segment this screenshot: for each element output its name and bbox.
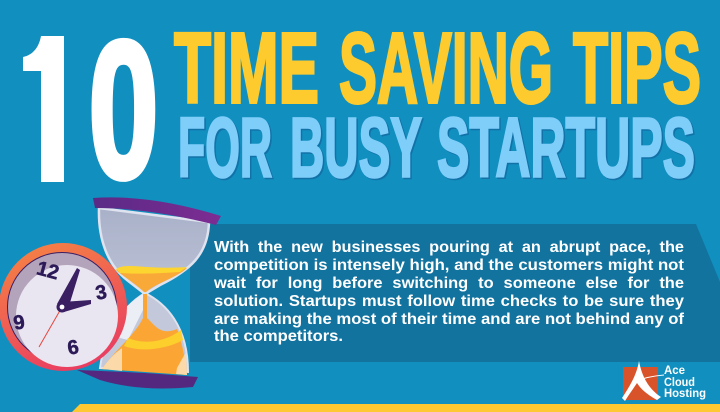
clock numbers: 12 (34, 257, 61, 284)
logo: ace cloud hosting (622, 361, 706, 401)
text block: intro paragraph: the competitors. (214, 328, 343, 345)
logo wordmark: Cloud (664, 377, 695, 389)
clock face (8, 253, 116, 361)
logo wordmark: Ace (664, 365, 685, 377)
logo letter shape (622, 361, 661, 401)
hourglass top sand (116, 268, 187, 293)
text block: intro paragraph: wait for long before switching to someone else for the (213, 275, 684, 292)
hourglass bottom sand (102, 294, 187, 375)
hourglass bottom bulb (100, 293, 188, 372)
subtitle: for busy startups: BUSY (290, 101, 422, 195)
text block: intro paragraph (213, 239, 685, 345)
clock numbers: 3 (94, 281, 109, 305)
subtitle: for busy startups: FOR (180, 102, 274, 196)
subtitle: for busy startups (178, 101, 696, 196)
title: number 10: 1 (15, 1, 83, 219)
text block: intro paragraph: With the new businesses pouring at an abrupt pace, the (214, 239, 684, 256)
clock numbers (12, 257, 109, 360)
text block: intro paragraph: competition is intensely high, and the customers might not (214, 257, 684, 274)
clock ring (0, 243, 127, 371)
panel: intro band (190, 224, 720, 362)
clock numbers: 6 (66, 336, 81, 360)
title: time saving tips: SAVING (339, 12, 553, 124)
title: time saving tips: TIME (174, 12, 319, 124)
icon: hourglass (77, 197, 221, 388)
title: number 10: 0 (88, 1, 158, 219)
clock hands (39, 307, 62, 347)
icon: clock (0, 243, 127, 371)
hourglass top bulb (99, 208, 209, 294)
text block: intro paragraph: solution. Startups must follow time checks to be sure they (214, 293, 684, 310)
hourglass bottom cap (77, 370, 198, 388)
hourglass top cap (93, 197, 221, 225)
subtitle: for busy startups: FOR (178, 101, 272, 195)
title: number 10 (23, 36, 156, 182)
logo square (623, 367, 658, 400)
footer: yellow bar (72, 404, 720, 412)
text block: intro paragraph: are making the most of their time and are not behind any of (214, 311, 685, 328)
clock numbers: 9 (12, 311, 27, 335)
title: time saving tips (174, 12, 701, 124)
subtitle: for busy startups: BUSY (292, 102, 424, 196)
logo wordmark (664, 365, 706, 400)
logo wordmark: Hosting (664, 388, 706, 400)
